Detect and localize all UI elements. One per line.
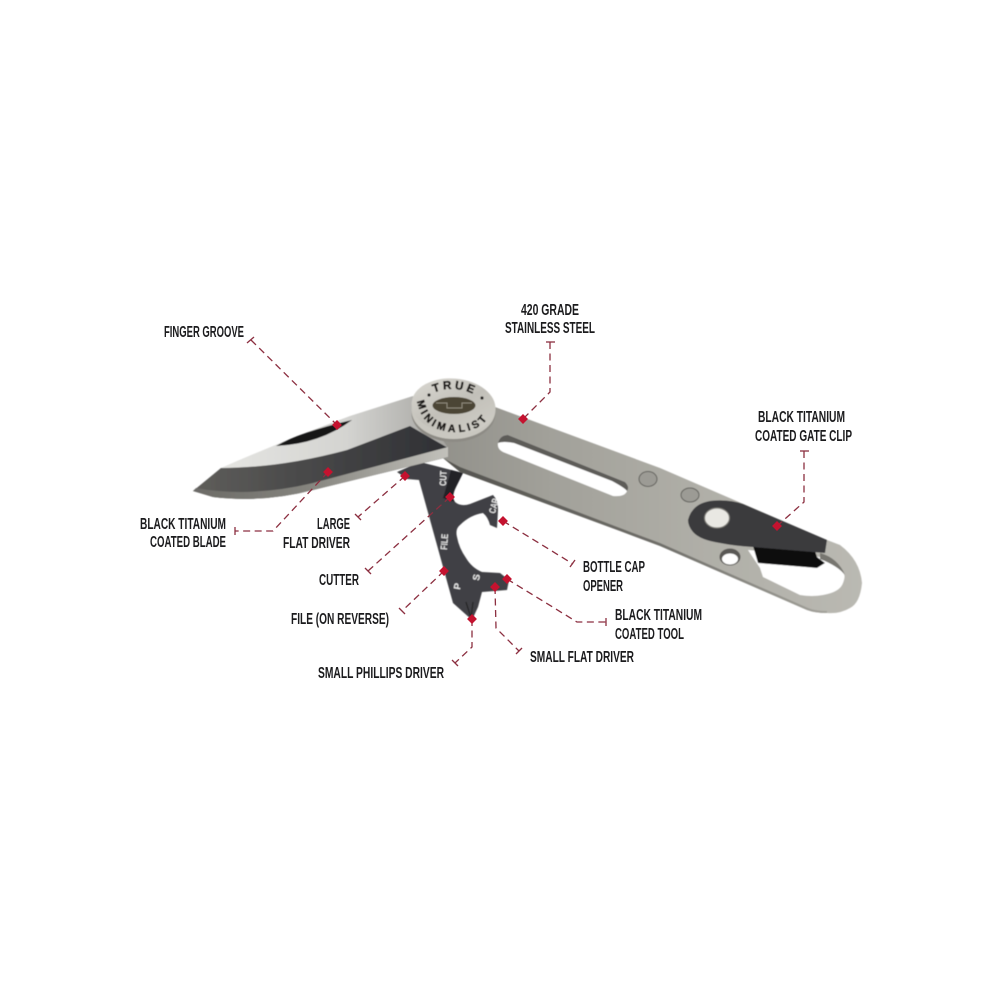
callout: cutter: [319, 492, 455, 589]
rivet holes: [639, 472, 657, 486]
blade bevel: [193, 447, 448, 499]
callout: 420 grade stainless steel: [505, 302, 595, 424]
lower dark edge: [443, 458, 827, 613]
callout: bottle cap opener: BOTTLE CAP: [583, 559, 645, 576]
callout: cutter: CUTTER: [319, 572, 359, 589]
knife photograph illustration: [192, 378, 862, 618]
callout: file on reverse: FILE (ON REVERSE): [291, 611, 389, 628]
callout: black titanium coated gate clip: BLACK TITANIUM: [758, 409, 845, 426]
callout: finger groove: [164, 324, 342, 430]
callout: black titanium coated tool: COATED TOOL: [615, 626, 684, 643]
gate clip: black titanium coated: [688, 500, 827, 568]
tool label: CUT: CUT: [438, 470, 450, 486]
callout: 420 grade stainless steel: STAINLESS STEEL: [505, 320, 595, 337]
tool label: P: P: [452, 582, 464, 591]
callout: small flat driver: [490, 582, 634, 666]
blade: black titanium coating: [193, 426, 448, 499]
callout: small phillips driver: SMALL PHILLIPS DRIVER: [318, 665, 444, 682]
callout: small phillips driver: [318, 614, 477, 682]
callout: finger groove: FINGER GROOVE: [164, 324, 244, 341]
callout: black titanium coated gate clip: [755, 409, 852, 531]
carabiner opening: [748, 550, 844, 596]
gate pivot pin: [704, 508, 730, 528]
tool label: CAP: CAP: [487, 497, 502, 515]
callout: black titanium coated tool: [502, 574, 702, 643]
pivot disk with brand logo: [412, 378, 496, 441]
callout: small flat driver: SMALL FLAT DRIVER: [530, 649, 634, 666]
tool label: FILE: FILE: [439, 533, 451, 550]
tool label: S: S: [471, 573, 483, 582]
callout: bottle cap opener: OPENER: [583, 578, 623, 595]
callout: black titanium coated blade: BLACK TITANIUM: [140, 516, 226, 533]
callout: black titanium coated gate clip: COATED GATE CLIP: [755, 428, 852, 445]
callout: large flat driver: FLAT DRIVER: [283, 535, 350, 552]
brand text: MINIMALIST: MINIMALIST: [416, 399, 486, 433]
handle: 420 grade stainless steel: [418, 396, 862, 613]
callout: file on reverse: [291, 566, 449, 628]
callout: 420 grade stainless steel: 420 GRADE: [521, 302, 579, 319]
callout: black titanium coated blade: COATED BLADE: [150, 534, 226, 551]
callout: large flat driver: LARGE: [317, 516, 350, 533]
callout: large flat driver: [283, 471, 410, 552]
callout: black titanium coated tool: BLACK TITANIUM: [615, 607, 702, 624]
logo mark: [432, 397, 476, 414]
multi-tool: black titanium coated tool: [397, 462, 509, 620]
callout: black titanium coated blade: [140, 467, 333, 551]
blade: silver upper with finger groove: [193, 396, 448, 499]
slot: [498, 435, 628, 496]
brand text: TRUE: TRUE: [430, 380, 476, 394]
finger groove: [276, 420, 352, 446]
callout: bottle cap opener: [498, 516, 645, 595]
